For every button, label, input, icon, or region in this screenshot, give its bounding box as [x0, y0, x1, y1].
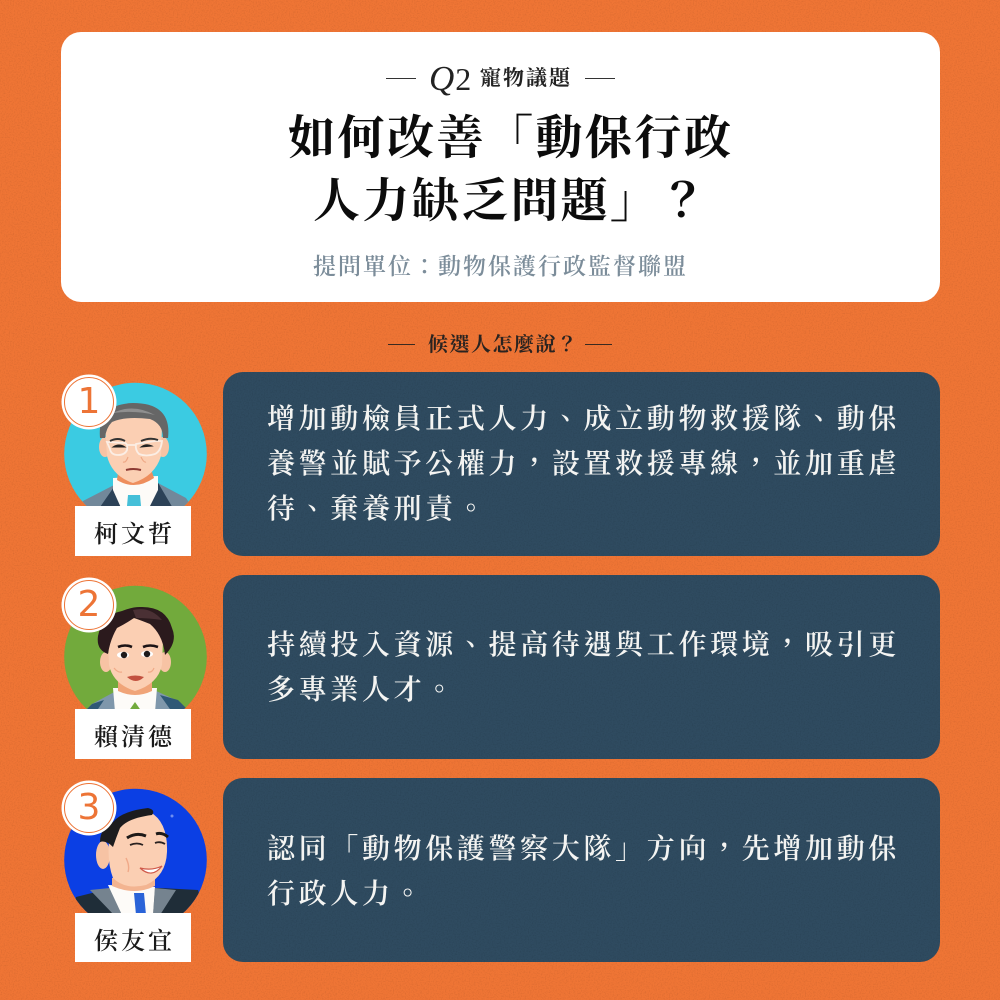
answer card 2: [223, 575, 940, 759]
main title: [288, 113, 734, 228]
question source: 提問單位：動物保護行政監督聯盟: [313, 254, 688, 279]
answer card 1: 待、棄養刑責。: [267, 494, 489, 525]
name label: 侯友宜: [75, 913, 191, 962]
number badge 2: 2: [78, 584, 100, 625]
main title: 如何改善「動保行政: [288, 113, 734, 165]
number badge 1: 1: [78, 381, 100, 422]
number badge 3: [64, 783, 114, 833]
answer card 2: 持續投入資源、提高待遇與工作環境，吸引更: [267, 630, 900, 661]
answer card 1: [223, 372, 940, 556]
name label: 賴清德: 賴清德: [94, 725, 175, 751]
answer card 1: 養警並賦予公權力，設置救援專線，並加重虐: [267, 449, 900, 480]
candidate row 3: [62, 778, 940, 962]
main title: 人力缺乏問題」？: [313, 176, 709, 228]
number badge 3: 3: [78, 787, 100, 828]
portrait: Hou Yu-ih: [64, 788, 207, 913]
name label: 賴清德: [75, 709, 191, 759]
name label: 侯友宜: 侯友宜: [94, 929, 175, 955]
answer card 1: 增加動檢員正式人力、成立動物救援隊、動保: [267, 404, 900, 435]
topic line: Q2 pet issue: [386, 59, 615, 98]
topic line: Q2 pet issue: Q2: [429, 59, 472, 98]
header panel: [61, 32, 940, 302]
answer card 3: 行政人力。: [267, 879, 425, 910]
candidate row 1: [62, 372, 940, 556]
section heading: 候選人怎麼說？: [428, 334, 578, 356]
candidate row 2: [62, 575, 940, 759]
number badge 1: [64, 377, 114, 427]
name label: 柯文哲: [75, 506, 191, 556]
number badge 2: [64, 580, 114, 630]
answer card 3: 認同「動物保護警察大隊」方向，先增加動保: [267, 834, 900, 865]
portrait: Lai Ching-te: [64, 586, 207, 709]
answer card 2: 多專業人才。: [267, 675, 457, 706]
topic line: Q2 pet issue: 寵物議題: [480, 66, 572, 90]
name label: 柯文哲: 柯文哲: [94, 522, 175, 548]
answer card 3: [223, 778, 940, 962]
portrait: Ko Wen-je: [64, 382, 207, 506]
